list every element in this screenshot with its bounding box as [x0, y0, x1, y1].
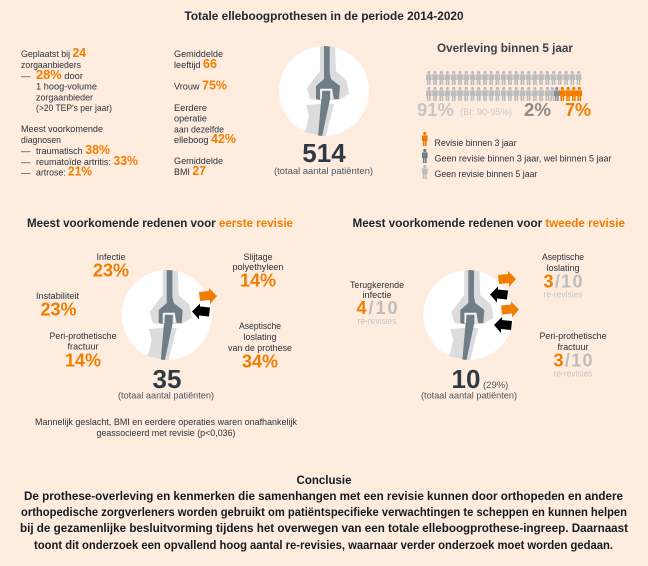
label: terugkerende infectie: Terugkerende — [350, 280, 404, 291]
label: terugkerende infectie — [350, 280, 404, 327]
label: instabiliteit — [36, 291, 79, 320]
text block: patient characteristics: elleboog 42% — [174, 131, 236, 146]
note: Mannelijk geslacht, BMI en eerdere operaties waren onafhankelijk — [35, 417, 297, 428]
total patients: 514 — [302, 138, 346, 168]
icon: elbow prosthesis, all patients — [279, 45, 369, 137]
total second revision: (29%) — [483, 380, 508, 391]
survival percentages — [417, 100, 591, 120]
label: peri-prothetische fractuur: fractuur — [68, 342, 98, 352]
icon: elbow prosthesis, second revision — [423, 269, 513, 361]
survival percentages: 7% — [565, 100, 591, 120]
label: peri-prothetische fractuur: fractuur — [558, 342, 588, 353]
label: peri-prothetische fractuur: Peri-prothetische — [50, 331, 116, 342]
label: aseptische loslating: loslating — [546, 263, 580, 274]
survival percentages: 91% — [417, 100, 454, 120]
conclusion: Conclusie — [297, 475, 351, 487]
label: aseptische loslating: Aseptische — [239, 321, 281, 332]
text block: patient characteristics: BMI 27 — [174, 163, 206, 178]
text block: zorgaanbieders and diagnoses: — — [21, 157, 31, 168]
label: aseptische loslating — [228, 321, 292, 372]
total first revision: (totaal aantal patiënten) — [118, 390, 214, 402]
conclusion: toont dit onderzoek een opvallend hoog aantal re-revisies, waarnaar verder onderzoek moet worden gedaan. — [34, 540, 613, 552]
label: peri-prothetische fractuur: Peri-prothetische — [540, 331, 606, 342]
text block: zorgaanbieders and diagnoses: zorgaanbieder — [36, 92, 93, 104]
total second revision — [421, 364, 517, 402]
label: peri-prothetische fractuur — [50, 331, 116, 370]
label: slijtage polyethyleen — [232, 252, 284, 290]
label: aseptische loslating: Aseptische — [542, 252, 584, 263]
heading: survival: Overleving binnen 5 jaar — [437, 41, 573, 55]
survival percentages: 2% — [524, 100, 551, 120]
text block: zorgaanbieders and diagnoses: diagnosen — [21, 135, 61, 146]
title: Totale elleboogprothesen in de periode 2014-2020 — [184, 9, 464, 23]
label: instabiliteit: Instabiliteit — [36, 291, 79, 302]
label: aseptische loslating: 34% — [242, 352, 278, 372]
text block: zorgaanbieders and diagnoses: Meest voorkomende — [21, 124, 103, 135]
label: slijtage polyethyleen: Slijtage — [244, 252, 272, 263]
text block: zorgaanbieders and diagnoses: 1 hoog-volume — [36, 82, 97, 92]
total second revision: (totaal aantal patiënten) — [421, 390, 517, 402]
label: slijtage polyethyleen: 14% — [240, 270, 276, 290]
heading: second revision: Meest voorkomende redenen voor tweede revisie — [352, 216, 625, 230]
label: terugkerende infectie: infectie — [362, 290, 392, 301]
legend — [422, 132, 612, 180]
label: peri-prothetische fractuur: re-revisies — [554, 368, 593, 380]
text block: zorgaanbieders and diagnoses: — — [21, 71, 31, 82]
arrow: in — [192, 304, 210, 320]
total patients: (totaal aantal patiënten) — [274, 166, 373, 177]
text block: zorgaanbieders and diagnoses: — — [21, 168, 31, 178]
text block: zorgaanbieders and diagnoses — [21, 45, 138, 178]
note — [35, 417, 297, 439]
label: peri-prothetische fractuur: 14% — [65, 350, 101, 370]
label: peri-prothetische fractuur: 3/10 — [554, 350, 592, 370]
heading: first revision: Meest voorkomende redenen voor eerste revisie — [27, 216, 293, 230]
label: infectie: 23% — [93, 260, 129, 280]
label: terugkerende infectie: re-revisies — [358, 316, 397, 327]
total first revision: 35 — [153, 364, 181, 394]
conclusion: bij de gezamenlijke besluitvorming tijdens het overwegen van een totale elleboogprothese-ingreep. Daarnaast — [20, 523, 628, 535]
total first revision — [118, 364, 214, 402]
text block: patient characteristics: leeftijd 66 — [174, 56, 217, 71]
conclusion — [20, 475, 628, 552]
text block: patient characteristics — [174, 49, 236, 178]
icon: elbow prosthesis, first revision — [122, 269, 212, 361]
label: aseptische loslating: van de prothese — [228, 343, 292, 354]
text block: patient characteristics: Gemiddelde — [174, 49, 223, 60]
text block: zorgaanbieders and diagnoses: traumatisch 38% — [36, 142, 110, 157]
text block: patient characteristics: operatie — [174, 114, 207, 124]
text block: zorgaanbieders and diagnoses: artrose: 21% — [36, 164, 92, 178]
arrow: out — [199, 288, 217, 304]
text block: zorgaanbieders and diagnoses: reumatoïde artritis: 33% — [36, 153, 138, 168]
text block: zorgaanbieders and diagnoses: zorgaanbieders — [21, 60, 81, 71]
label: aseptische loslating: 3/10 — [544, 272, 582, 292]
text block: zorgaanbieders and diagnoses: Geplaatst bij 24 — [21, 45, 87, 60]
conclusion: De prothese-overleving en kenmerken die samenhangen met een revisie kunnen door orthopeden en andere — [24, 491, 623, 503]
pictogram: survival of 50 patients — [426, 71, 582, 101]
text block: patient characteristics: aan dezelfde — [174, 124, 224, 136]
arrows: second revision — [490, 271, 519, 333]
label: instabiliteit: 23% — [40, 300, 77, 320]
note: geassocieerd met revisie (p<0,036) — [96, 428, 236, 439]
label: slijtage polyethyleen: polyethyleen — [232, 262, 284, 273]
total patients — [274, 138, 373, 177]
label: aseptische loslating: loslating — [244, 332, 276, 343]
text block: patient characteristics: Eerdere — [174, 103, 207, 114]
label: infectie: Infectie — [96, 252, 126, 263]
label: peri-prothetische fractuur — [540, 331, 606, 380]
text block: patient characteristics: Vrouw 75% — [174, 78, 227, 92]
survival percentages: (BI: 90-95%) — [460, 107, 512, 118]
legend: Geen revisie binnen 3 jaar, wel binnen 5 jaar — [434, 154, 612, 164]
legend: Revisie binnen 3 jaar — [434, 138, 516, 149]
total second revision: 10 — [452, 364, 480, 394]
label: aseptische loslating — [542, 252, 584, 300]
text block: zorgaanbieders and diagnoses: 28% door — [36, 67, 83, 82]
text block: zorgaanbieders and diagnoses: — — [21, 146, 31, 157]
text block: zorgaanbieders and diagnoses: (>20 TEP's per jaar) — [36, 103, 112, 114]
legend: Geen revisie binnen 5 jaar — [434, 169, 538, 180]
text block: patient characteristics: Gemiddelde — [174, 156, 223, 167]
label: aseptische loslating: re-revisies — [544, 290, 583, 300]
label: terugkerende infectie: 4/10 — [356, 298, 398, 318]
conclusion: orthopedische zorgverleners worden gebruikt om patiëntspecifieke verwachtingen te scheppen en kunnen helpen — [21, 507, 627, 519]
